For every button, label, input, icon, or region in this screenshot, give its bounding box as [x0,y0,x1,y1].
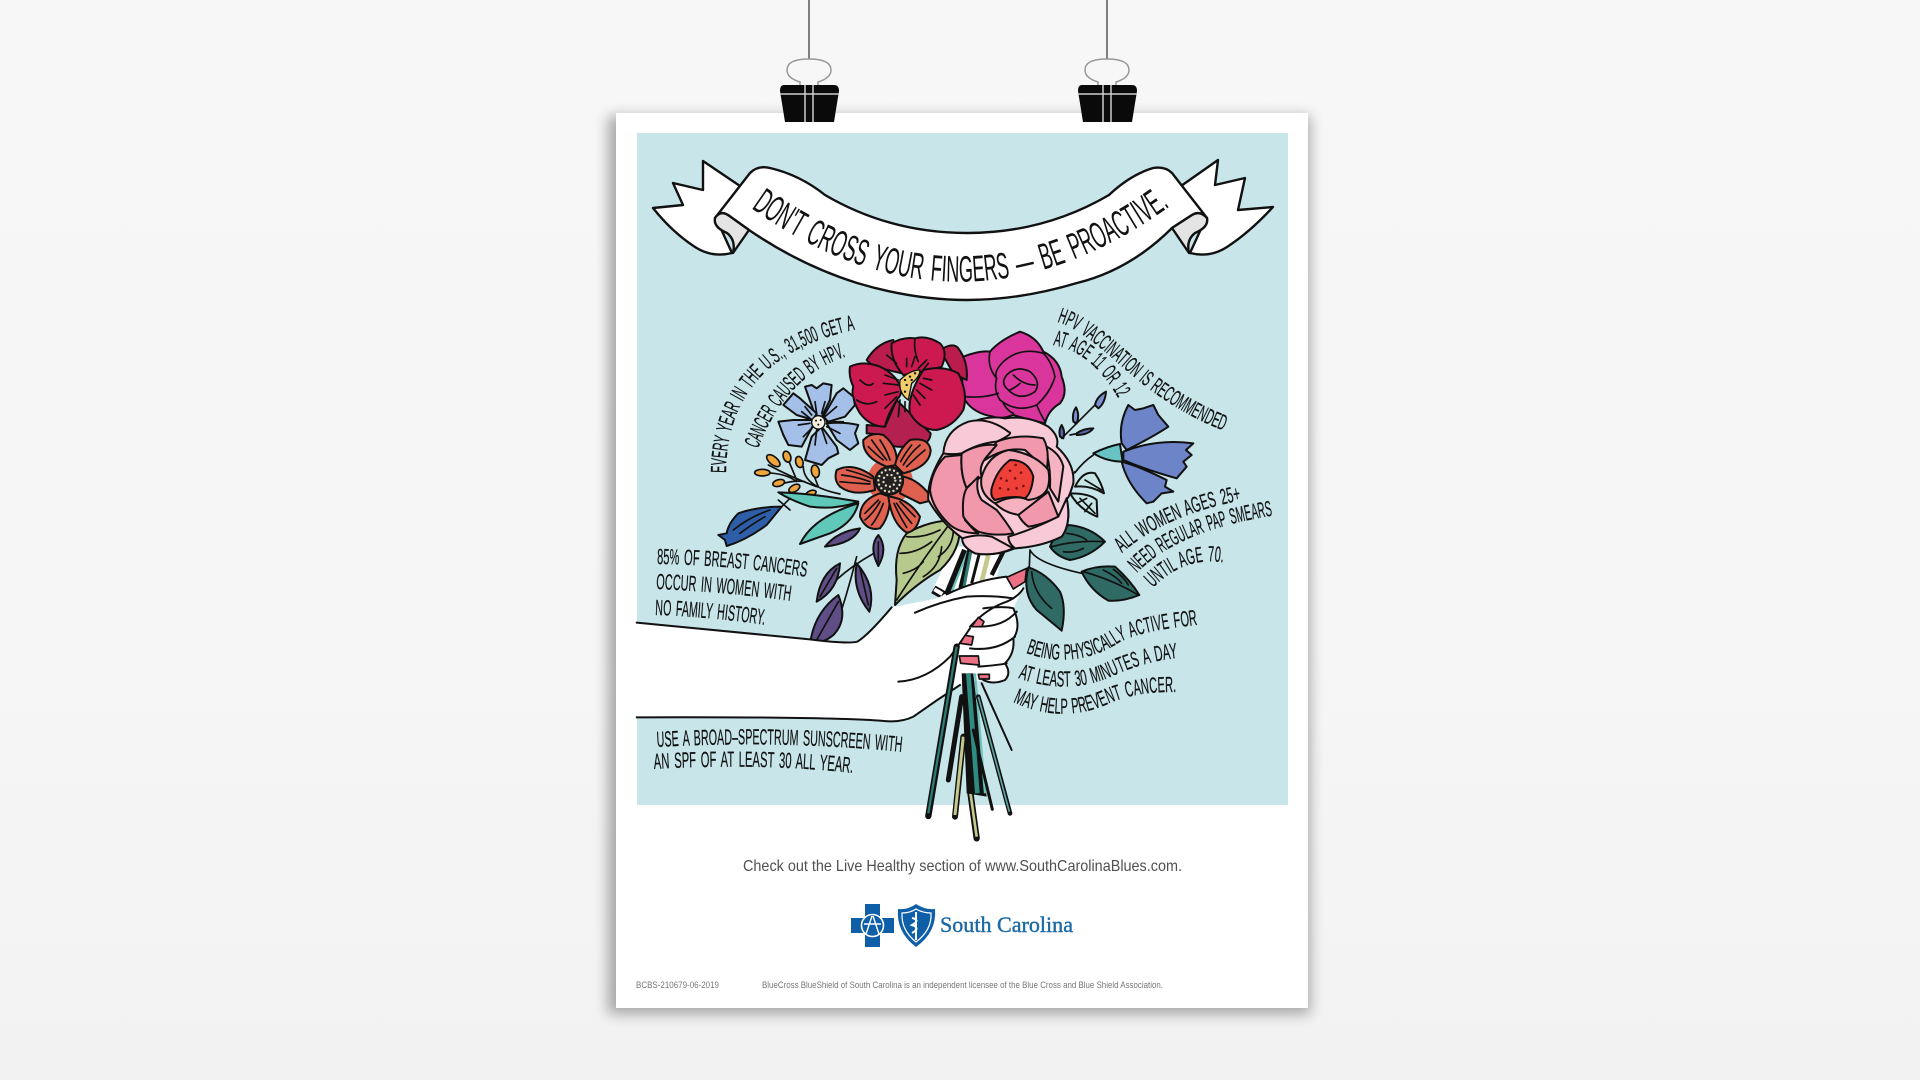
icon: blue shield [898,904,935,947]
upper stems behind hand [933,547,1005,597]
text: pap smear fact: UNTIL AGE 70. [1143,546,1223,586]
icon: left binder clip [780,0,839,122]
text: pap smear fact: ALL WOMEN AGES 25+ [1114,487,1240,554]
text: breast cancer fact: NO FAMILY HISTORY. [656,600,765,625]
hand [637,577,1023,721]
lower stems [928,647,1012,838]
text: HPV vaccination fact: HPV VACCINATION IS RECOMMENDED [1058,308,1227,430]
bouquet illustration [637,332,1193,838]
text: HPV cancer fact: CANCER CAUSED BY HPV. [744,343,845,447]
text: physical activity fact: MAY HELP PREVENT CANCER. [1014,676,1176,714]
text: sunscreen fact: AN SPF OF AT LEAST 30 ALL YEAR. [654,752,852,773]
flower: crimson poppy [850,337,967,447]
flower: coral dahlia [836,434,933,533]
text: sunscreen fact: USE A BROAD–SPECTRUM SUNSCREEN WITH [656,728,902,752]
text: physical activity fact: AT LEAST 30 MINUTES A DAY [1018,642,1176,687]
footer: document code: BCBS-210679-06-2019 [636,980,719,990]
logo wordmark: South Carolina [940,912,1073,937]
banner ribbon [653,160,1273,300]
panel: light blue illustration background [637,133,1288,805]
icon: blue cross [851,904,894,947]
lower right leaf and fingernails [959,567,1064,679]
text: physical activity fact: BEING PHYSICALLY ACTIVE FOR [1026,610,1198,660]
sprigs, teal leaves and blue bud [718,450,858,546]
text: HPV cancer fact: EVERY YEAR IN THE U.S., 31,500 GET A [710,316,856,472]
text: breast cancer fact: OCCUR IN WOMEN WITH [656,574,792,601]
poster shadow [608,116,1310,1014]
dark right leaves and carnation [1029,392,1193,601]
text: call to action: Check out the Live Healthy section of www.SouthCarolinaBlues.com. [743,858,1182,875]
green leaf [895,520,960,605]
flower: large pink rose [928,417,1073,554]
logo: BlueCross BlueShield South Carolina [851,904,1073,947]
icon: right binder clip [1078,0,1137,122]
flower: pale blue cornflower [778,383,858,465]
text: breast cancer fact: 85% OF BREAST CANCERS [658,548,808,577]
poster sheet [616,113,1308,1008]
text: sunscreen fact [654,728,902,773]
purple leaves [810,528,883,645]
flower: magenta rose [962,332,1065,423]
footer: licensee disclaimer: BlueCross BlueShield of South Carolina is an independent licensee of the Blue Cross and Blue Shield Association. [762,980,1163,990]
text: physical activity fact [1014,610,1198,714]
text: pap smear fact: NEED REGULAR PAP SMEARS [1126,500,1272,572]
text: breast cancer fact [656,548,808,625]
title: banner text: DON'T CROSS YOUR FINGERS — BE PROACTIVE. [752,188,1169,282]
